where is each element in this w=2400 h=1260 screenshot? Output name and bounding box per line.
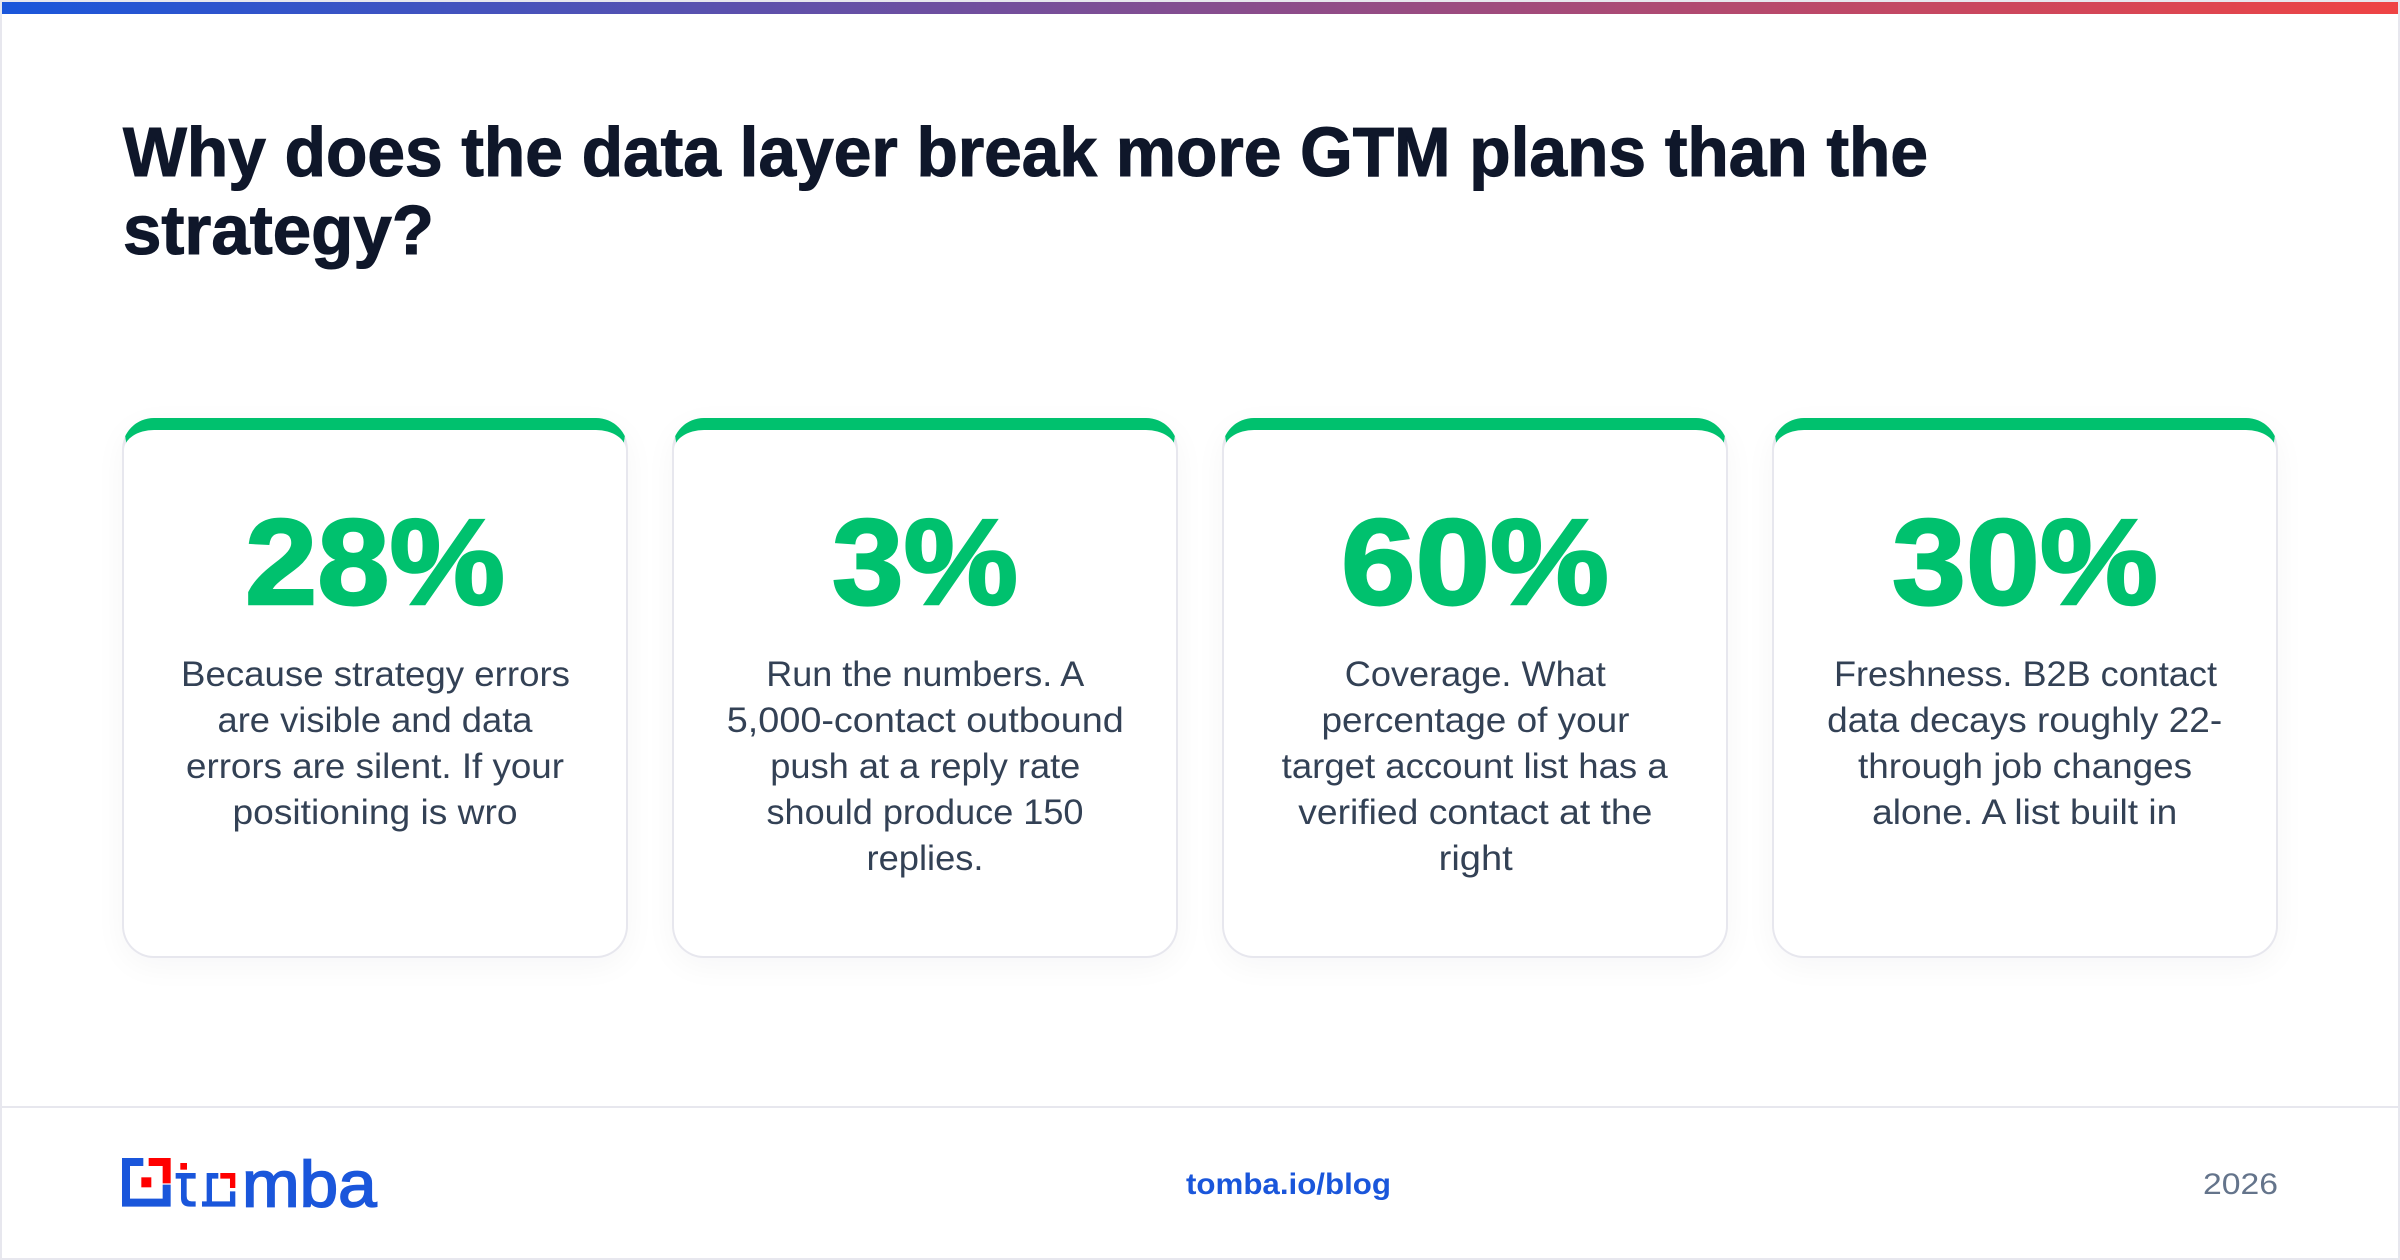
text block: card 1 description: are visible and data [218, 701, 533, 740]
text block: card 2 description: replies. [866, 839, 984, 878]
text block: card 3 description: right [1439, 839, 1513, 878]
panel: stat card 60% [1222, 418, 1728, 958]
text block: card 2 description: should produce 150 [766, 793, 1084, 832]
stat: 28%: 28% [245, 494, 505, 630]
title: strategy? [123, 191, 434, 269]
text block: card 4 description: Freshness. B2B contact [1834, 655, 2217, 694]
text block: card 1 description: positioning is wro [232, 793, 518, 832]
footer link: tomba.io/blog [1186, 1168, 1391, 1201]
text block: card 2 description: push at a reply rate [770, 747, 1080, 786]
text block: card 1 description: errors are silent. If your [186, 747, 564, 786]
text block: card 4 description: through job changes [1858, 747, 2192, 786]
text block: card 3 description: target account list has a [1282, 747, 1668, 786]
title: Why does the data layer break more GTM plans than the [123, 113, 1928, 191]
text block: card 3 description: percentage of your [1322, 701, 1630, 740]
text block: card 2 description: Run the numbers. A [766, 655, 1085, 694]
text block: card 4 description: alone. A list built in [1872, 793, 2177, 832]
stat: 30%: 30% [1892, 494, 2158, 630]
panel: stat card 28% [122, 418, 628, 958]
text block: card 2 description: 5,000-contact outbound [727, 701, 1124, 740]
stat: 60%: 60% [1341, 494, 1609, 630]
text block: card 1 description: Because strategy errors [181, 655, 570, 694]
logo: tomba: mba [242, 1147, 377, 1220]
text block: card 3 description: verified contact at the [1298, 793, 1652, 832]
title [122, 113, 1928, 270]
text block: card 4 description: data decays roughly 22- [1827, 701, 2222, 740]
stat: 3%: 3% [832, 494, 1018, 630]
text block: card 3 description [1282, 655, 1668, 878]
text block: card 4 description [1827, 655, 2222, 832]
top gradient bar [2, 2, 2398, 14]
footer divider [2, 1106, 2398, 1108]
text block: card 1 description [181, 655, 570, 832]
text block: card 3 description: Coverage. What [1345, 655, 1606, 694]
footer year: 2026 [2203, 1168, 2278, 1201]
panel: stat card 30% [1772, 418, 2278, 958]
panel: stat card 3% [672, 418, 1178, 958]
text block: card 2 description [727, 655, 1124, 878]
